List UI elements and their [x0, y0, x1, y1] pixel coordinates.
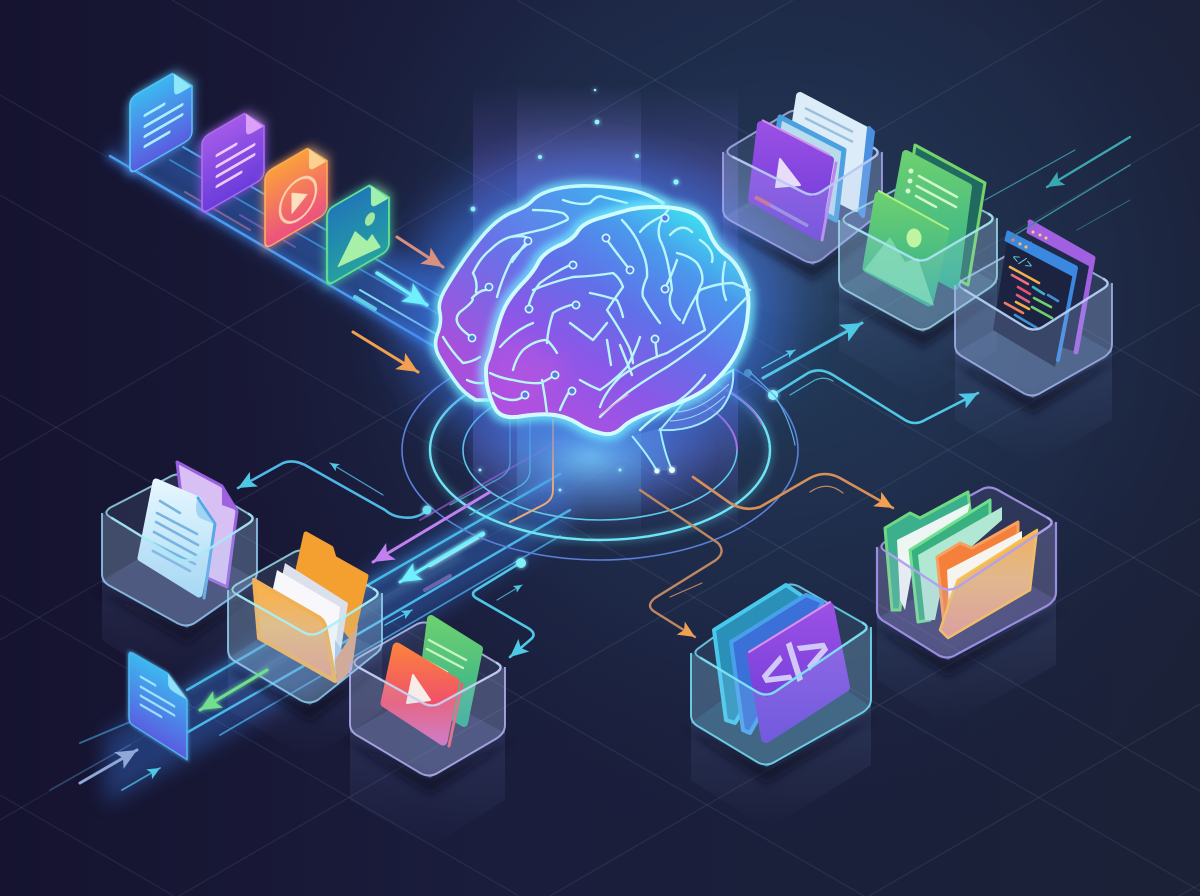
front lobe	[486, 207, 750, 434]
code symbol: </>	[748, 620, 842, 706]
bin A: paper documents	[92, 462, 265, 695]
bin 2: green documents and image	[830, 145, 1005, 400]
arrows: output to top-right bins	[744, 137, 1130, 445]
bottom-left stand-alone document	[129, 651, 187, 760]
circuit traces below brain	[450, 415, 553, 522]
folder: paper sheets	[265, 563, 348, 680]
file: blue code window	[993, 232, 1076, 367]
bin C: video and green document	[340, 619, 515, 848]
brain stem and cerebellum	[632, 370, 733, 474]
brain	[370, 130, 820, 490]
file: green document	[421, 619, 479, 723]
file: teal card	[714, 585, 808, 723]
arrows: input toward brain	[353, 237, 443, 372]
file: green list document	[888, 145, 985, 286]
file: white document	[788, 96, 873, 216]
file icons: top-left input documents	[130, 62, 389, 286]
icon: purple document	[202, 102, 264, 214]
code tag label: </>	[1009, 251, 1035, 273]
file: blue document	[770, 117, 844, 220]
bin D: code cards	[682, 582, 880, 830]
file: green image card	[864, 191, 948, 306]
folder: orange front panel	[254, 580, 358, 685]
icon: green image document	[327, 174, 389, 286]
icon: orange video document	[265, 137, 327, 249]
file: purple code card	[748, 602, 845, 738]
arrows: output to bottom-left bins	[80, 461, 534, 790]
folder: orange back panel	[298, 534, 366, 638]
platform rings under brain	[402, 340, 798, 560]
folder: second green	[910, 500, 1002, 622]
file: lilac document	[177, 462, 237, 587]
arrows: output to bottom-right bins	[640, 474, 893, 637]
light beam column behind brain	[473, 85, 738, 535]
bin 1: video and documents	[715, 96, 890, 335]
bin B: orange folder	[220, 534, 390, 760]
folder: first green	[885, 492, 970, 610]
file: red video card	[385, 647, 462, 746]
file: purple video card	[752, 120, 836, 240]
bin E: folders	[868, 485, 1065, 725]
sparkle particles	[471, 89, 679, 491]
file: white document	[141, 482, 215, 598]
folder: orange	[937, 522, 1018, 635]
file: blue card	[731, 595, 823, 733]
folder: yellow front with paper	[940, 530, 1037, 638]
bin 3: code windows	[945, 221, 1120, 465]
output data stream to bottom left	[50, 440, 570, 805]
icon: blue document	[130, 62, 192, 174]
back lobe	[436, 186, 663, 400]
input data stream from top left	[105, 135, 450, 360]
file: purple code window	[1028, 221, 1093, 352]
